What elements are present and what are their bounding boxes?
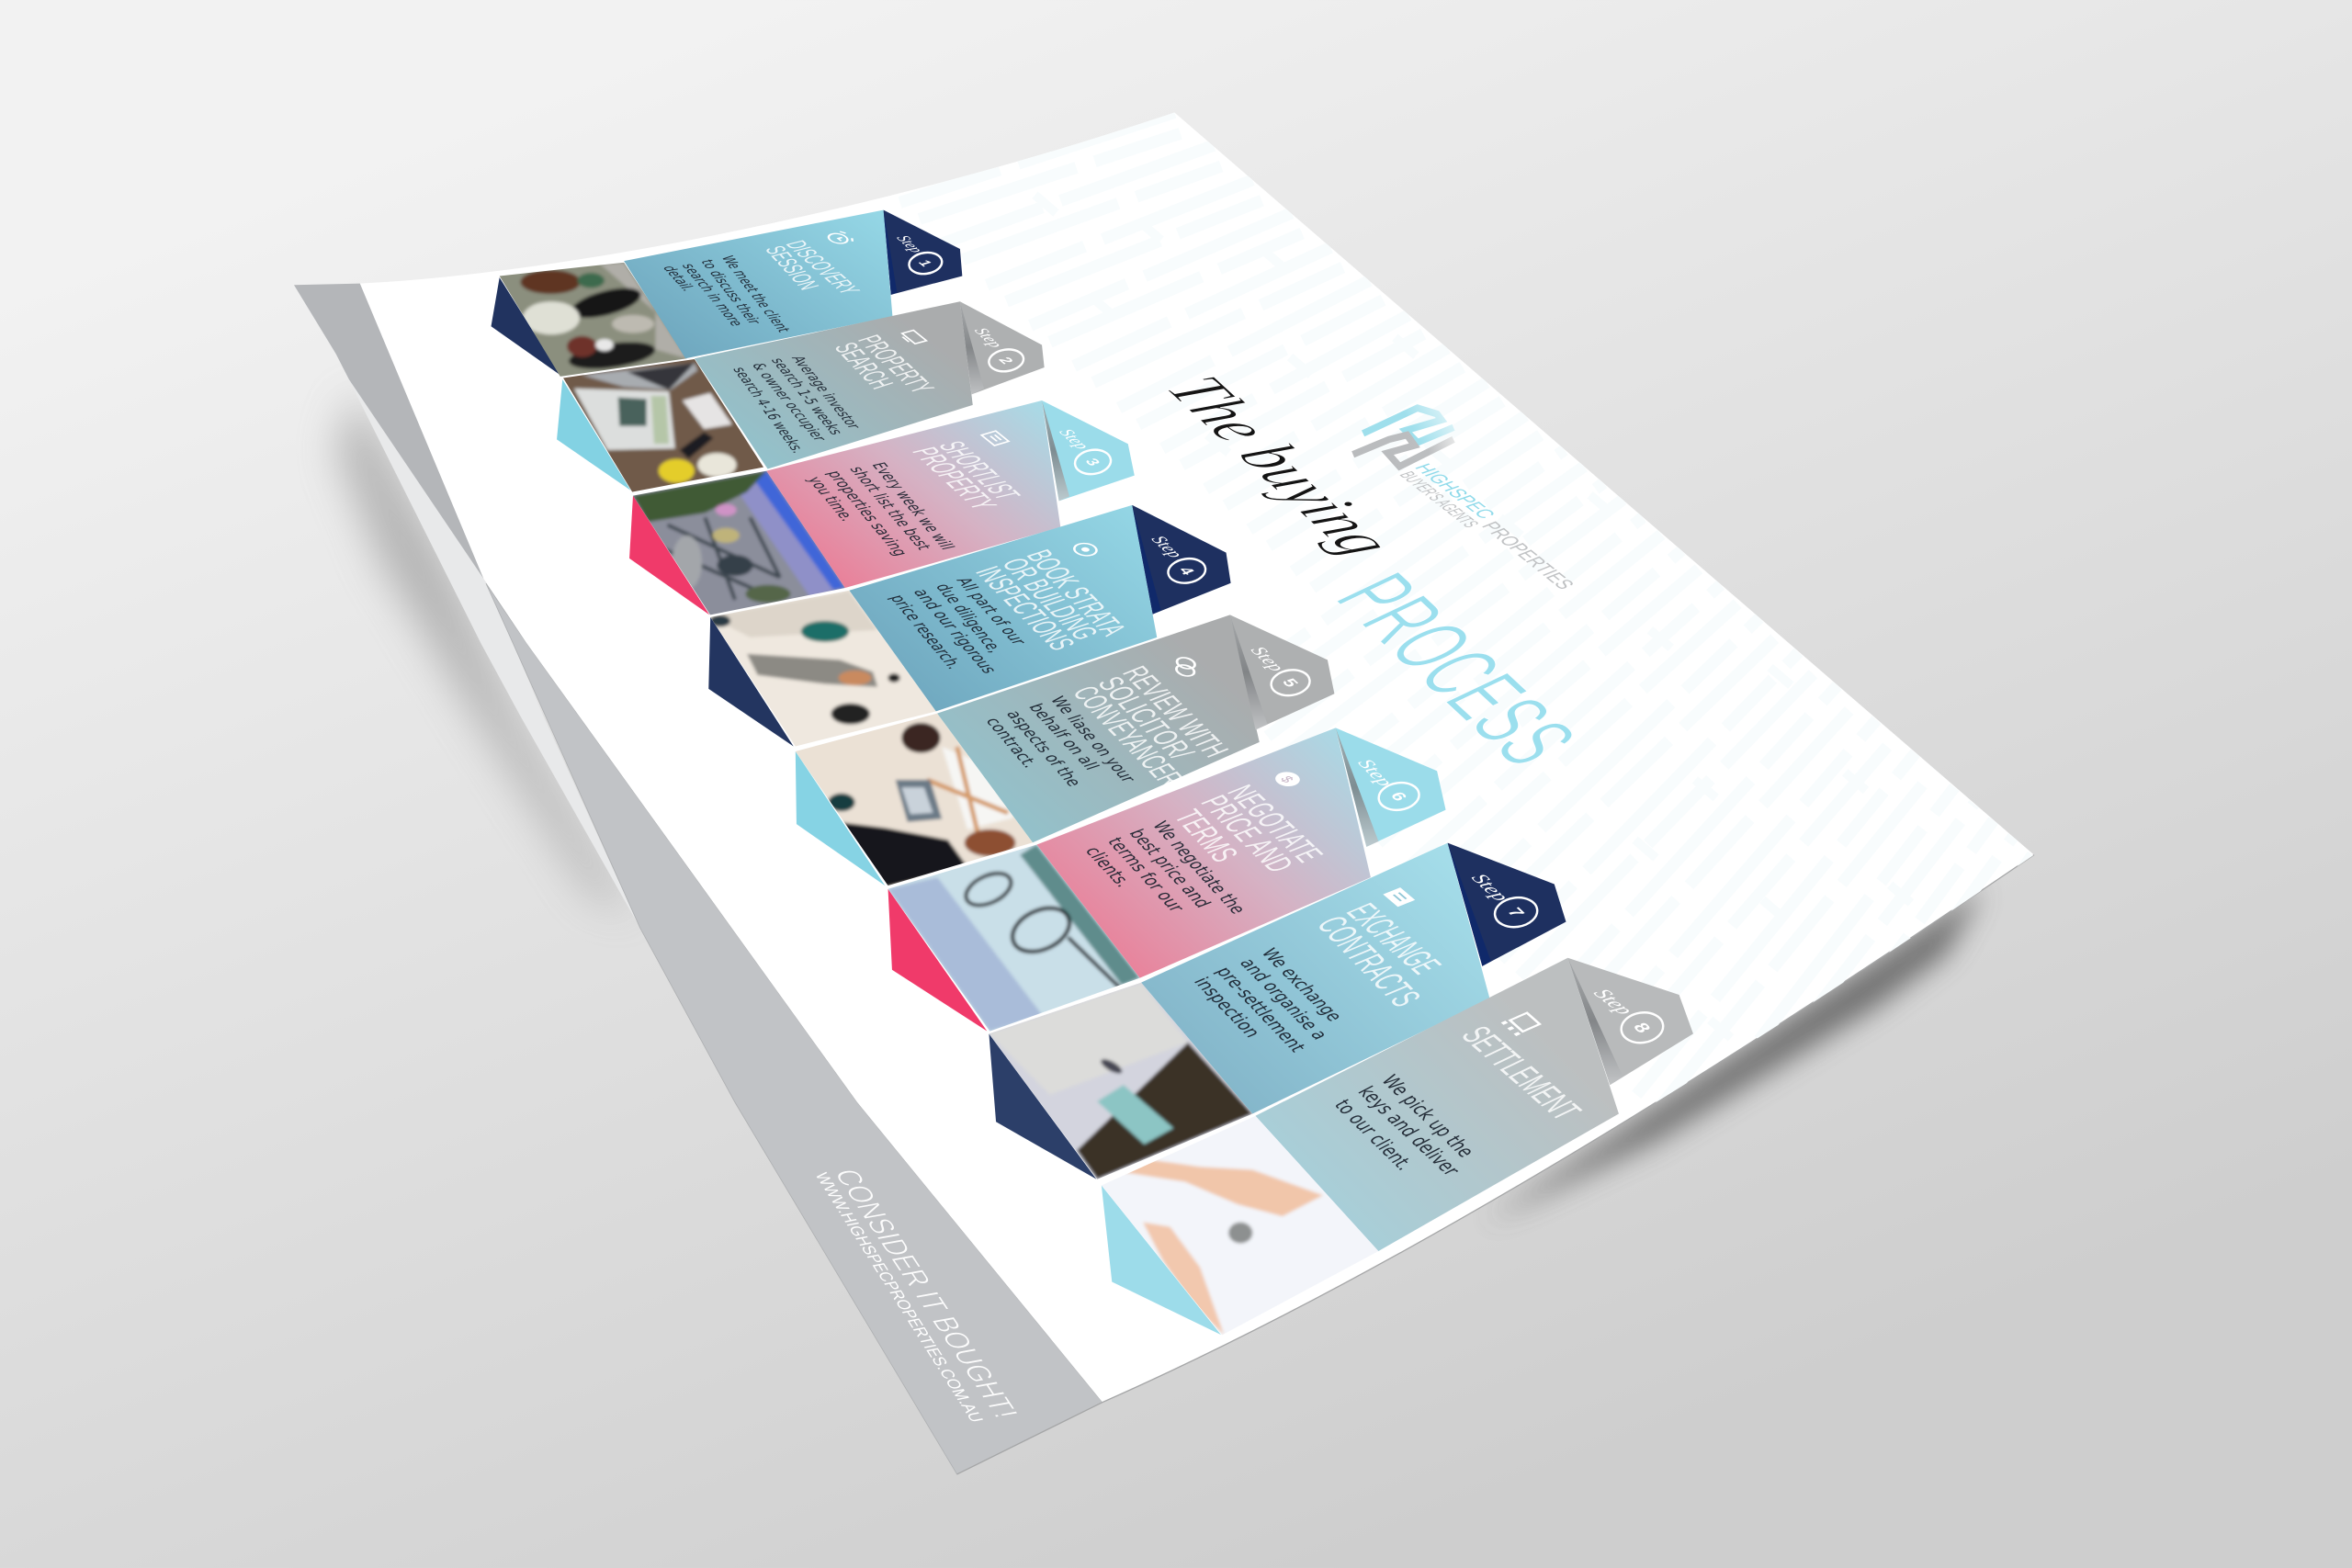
photo: office meeting — [796, 713, 1033, 886]
shadow: lower right — [1485, 888, 1983, 1223]
card heading: OR BUILDING — [994, 555, 1104, 643]
icon: target — [1070, 541, 1101, 558]
photo: meeting — [500, 263, 687, 377]
card heading: PROPERTY — [905, 445, 1004, 513]
panel: step 8 — [1088, 958, 1693, 1349]
card text: keys and deliver — [1352, 1083, 1465, 1179]
card text: clients. — [1080, 844, 1136, 890]
icon: thumbs up — [1503, 1011, 1541, 1035]
panel: step 3 — [615, 400, 1135, 630]
card heading: SOLICITOR/ — [1090, 672, 1201, 764]
tab fold — [1230, 615, 1268, 729]
shadow: left curl — [337, 393, 630, 915]
photo: handing over keys — [1102, 1116, 1378, 1335]
icon: alarm clock — [824, 231, 855, 245]
card body — [1036, 728, 1371, 978]
card text: We exchange — [1256, 946, 1346, 1024]
step label: Step — [1589, 987, 1637, 1018]
card text: behalf on all — [1024, 701, 1104, 773]
card text — [981, 694, 1139, 788]
card heading: SHORTLIST — [931, 438, 1028, 502]
card heading: BOOK STRATA — [1019, 547, 1134, 639]
icon: dollar: $ — [1276, 774, 1296, 784]
card text: Every week we will — [867, 461, 958, 551]
accent triangle — [989, 1033, 1096, 1179]
card text: terms for our — [1102, 835, 1189, 915]
card text: inspection — [1189, 975, 1265, 1040]
card text: search 1-5 weeks — [767, 356, 847, 436]
card heading: NEGOTIATE — [1219, 781, 1330, 866]
logo mark — [1353, 408, 1453, 467]
card text — [659, 254, 794, 333]
step number: 6 — [1386, 790, 1411, 803]
card heading: SESSION — [759, 243, 824, 292]
card text: pre-settlement — [1211, 964, 1309, 1055]
card text: All part of our — [952, 576, 1031, 647]
card text: We meet the client — [718, 254, 794, 333]
card text: price research. — [886, 592, 966, 671]
card text — [1080, 818, 1250, 917]
step number: 7 — [1503, 906, 1528, 919]
card text: you time. — [803, 476, 858, 523]
icon: document — [981, 431, 1009, 446]
card body — [937, 615, 1260, 842]
card text: & owner occupier — [748, 362, 831, 443]
card body — [1141, 843, 1490, 1113]
card heading: EXCHANGE — [1338, 898, 1450, 979]
card heading: DISCOVERY — [780, 238, 865, 297]
accent triangle — [557, 379, 631, 491]
accent triangle — [708, 617, 794, 746]
card text: and our rigorous — [909, 587, 1001, 675]
card heading: REVIEW WITH — [1114, 662, 1235, 761]
card heading: SETTLEMENT — [1453, 1021, 1589, 1125]
tab fold — [1132, 505, 1161, 615]
card heading: PROPERTY — [851, 332, 941, 397]
step number — [1167, 557, 1207, 585]
card text: and organise a — [1235, 956, 1332, 1043]
card text — [729, 355, 865, 455]
tab fold — [1448, 843, 1491, 966]
card text: We negotiate the — [1148, 818, 1250, 917]
step tab — [1567, 958, 1693, 1085]
step label: Step — [893, 233, 927, 254]
card text — [886, 576, 1031, 675]
card body — [624, 210, 892, 358]
card text: best price and — [1124, 827, 1215, 910]
card text: We pick up the — [1376, 1071, 1480, 1161]
step number — [988, 347, 1025, 374]
step number: 4 — [1175, 565, 1199, 577]
photo: house — [633, 470, 845, 615]
accent triangle — [796, 751, 885, 886]
card text: to our client. — [1329, 1097, 1418, 1174]
maze background pattern — [1656, 855, 2033, 1102]
tab fold — [1336, 728, 1378, 847]
card text: due diligence, — [932, 581, 1007, 655]
step number — [1270, 668, 1311, 698]
step number: 3 — [1081, 457, 1104, 468]
step tab — [1230, 615, 1334, 729]
photo: glasses — [888, 845, 1139, 1031]
lower footer band — [486, 583, 1102, 1474]
tab fold — [1042, 400, 1069, 501]
tab fold — [1567, 958, 1623, 1085]
tab fold — [884, 210, 897, 295]
second sheet edge — [333, 348, 639, 928]
step tab — [1336, 728, 1446, 847]
step label: Step — [1146, 534, 1187, 560]
panel: step 7 — [975, 843, 1566, 1192]
step label: Step — [970, 325, 1008, 350]
card body — [695, 301, 973, 469]
heading: The buying: The buying — [1148, 368, 1413, 563]
card text: search 4-16 weeks. — [729, 366, 808, 455]
step label: Step — [1055, 427, 1094, 451]
panel: step 1 — [480, 210, 962, 390]
card heading: CONVEYANCER — [1065, 682, 1192, 790]
card heading: PRICE AND — [1193, 791, 1301, 877]
icon: dollar — [1271, 769, 1305, 789]
panel: step 5 — [773, 615, 1334, 900]
accent triangle — [629, 496, 709, 615]
accent triangle — [492, 277, 560, 375]
card heading: TERMS — [1167, 805, 1246, 866]
accent triangle — [888, 889, 987, 1031]
logo — [1353, 408, 1578, 592]
icon: contract — [1383, 887, 1415, 907]
step number — [1377, 780, 1420, 813]
step number: 5 — [1278, 676, 1302, 689]
heading: PROCESS: PROCESS — [1314, 560, 1599, 779]
flyer paper — [360, 112, 2034, 1403]
accent triangle — [1102, 1185, 1221, 1335]
panel: step 4 — [690, 505, 1231, 758]
card text — [803, 461, 958, 558]
photo: signing contract — [989, 983, 1252, 1179]
step label: Step — [1466, 872, 1513, 904]
logo subline: BUYER'S AGENTS — [1395, 469, 1484, 530]
step number: 8 — [1629, 1021, 1655, 1035]
card text: contract. — [981, 716, 1041, 771]
card text: We liase on your — [1046, 694, 1139, 785]
step number: 2 — [995, 355, 1016, 366]
card heading: INSPECTIONS — [967, 563, 1081, 654]
card text: search in more — [678, 263, 746, 327]
card heading: SEARCH — [827, 339, 899, 392]
icon: screen — [899, 331, 926, 344]
card heading — [1167, 781, 1330, 877]
card heading: CONTRACTS — [1307, 911, 1430, 1012]
step number: 1 — [914, 259, 936, 268]
photo: woman on sofa — [711, 590, 935, 746]
lower edge of paper — [957, 855, 2034, 1474]
upper footer band — [294, 284, 484, 579]
step number — [1493, 895, 1539, 930]
card text — [1189, 946, 1346, 1055]
step label: Step — [1352, 757, 1396, 790]
step label: Step — [1246, 645, 1288, 674]
card text: properties saving — [823, 468, 912, 558]
card text: aspects of the — [1002, 708, 1086, 788]
step tab — [1132, 505, 1231, 615]
card body — [1256, 958, 1619, 1251]
card text — [1329, 1071, 1480, 1179]
tab fold — [960, 301, 984, 394]
step tab — [960, 301, 1045, 394]
card body — [849, 505, 1157, 711]
card heading — [967, 547, 1134, 654]
card text: to discuss their — [696, 259, 763, 325]
logo wordmark: HIGHSPEC — [1410, 461, 1500, 521]
step tab — [884, 210, 962, 295]
panel: step 2 — [540, 301, 1045, 502]
step tab — [1448, 843, 1566, 966]
photo: newspaper on table — [563, 359, 763, 492]
step tab — [1042, 400, 1135, 501]
step number — [1073, 447, 1113, 477]
icon: speech bubbles — [1167, 656, 1204, 678]
card text: detail. — [659, 265, 698, 292]
panel: step 6 — [870, 728, 1446, 1043]
card heading — [1065, 662, 1235, 790]
card text: short list the best — [845, 465, 936, 551]
logo wordmark grey: PROPERTIES — [1476, 519, 1578, 592]
step number — [908, 251, 944, 276]
card text: Average investor — [787, 355, 865, 431]
step number — [1620, 1010, 1665, 1045]
card body — [766, 400, 1060, 588]
